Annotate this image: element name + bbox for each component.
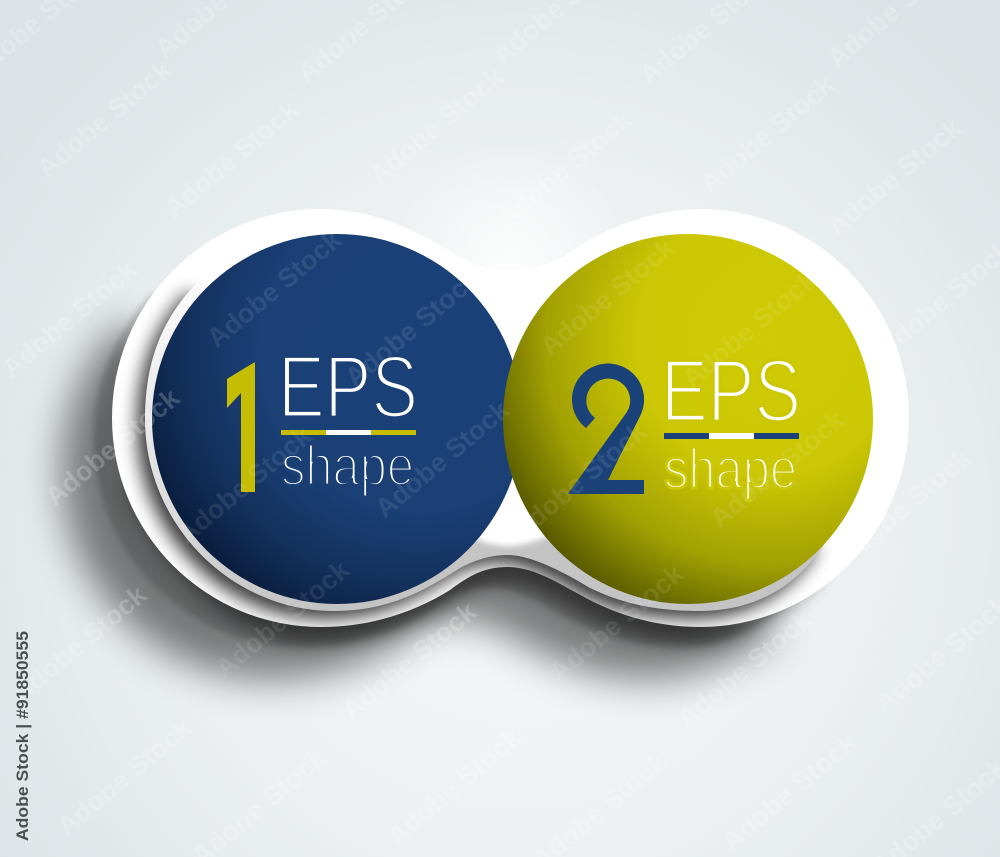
label: shape 2: shape <box>664 437 797 501</box>
watermarks: Adobe Stock <box>0 254 143 384</box>
watermarks: Adobe Stock <box>369 394 516 524</box>
watermarks: Adobe Stock <box>716 727 863 857</box>
watermarks: Adobe Stock <box>158 94 305 224</box>
glow above the neck <box>390 142 630 382</box>
watermarks: Adobe Stock <box>201 224 348 354</box>
watermarks: Adobe Stock <box>363 61 510 191</box>
heading: EPS 2: EPS <box>661 341 801 440</box>
heading: EPS 1: EPS <box>278 337 418 436</box>
divider 1 <box>281 430 416 435</box>
panel: blue circle <box>152 234 522 604</box>
watermarks: Adobe Stock <box>534 232 681 362</box>
number 1: 1 <box>205 325 308 532</box>
watermarks: Adobe Stock <box>671 604 818 734</box>
divider 2 <box>664 433 799 439</box>
inner rim layer <box>145 283 825 611</box>
watermarks: Adobe Stock <box>39 382 186 512</box>
watermarks: Adobe Stock <box>6 579 153 709</box>
watermarks: Adobe Stock <box>336 596 483 726</box>
watermarks: Adobe Stock <box>381 722 528 852</box>
watermarks: Adobe Stock <box>694 69 841 199</box>
watermarks: Adobe Stock <box>339 263 486 393</box>
watermarks: Adobe Stock <box>704 404 851 534</box>
watermarks: Adobe Stock <box>831 442 978 572</box>
watermarks: Adobe Stock <box>171 420 318 550</box>
watermarks: Adobe Stock <box>821 112 968 242</box>
watermarks: Adobe Stock <box>506 416 653 546</box>
watermarks: Adobe Stock <box>676 264 823 394</box>
panel: yellow circle <box>503 234 873 604</box>
white connector between circles <box>440 300 580 546</box>
watermarks: Adobe Stock <box>51 712 198 842</box>
label: shape 1: shape <box>281 434 414 498</box>
watermarks: Adobe Stock <box>31 54 178 184</box>
watermarks: Adobe Stock <box>209 554 356 684</box>
watermarks: Adobe Stock <box>543 558 690 688</box>
number 2: 2 <box>558 328 661 535</box>
stock id: Adobe Stock | #91850555 <box>13 631 32 841</box>
watermarks: Adobe Stock <box>491 104 638 234</box>
long shadow <box>62 293 821 679</box>
white outer shape <box>112 209 909 627</box>
